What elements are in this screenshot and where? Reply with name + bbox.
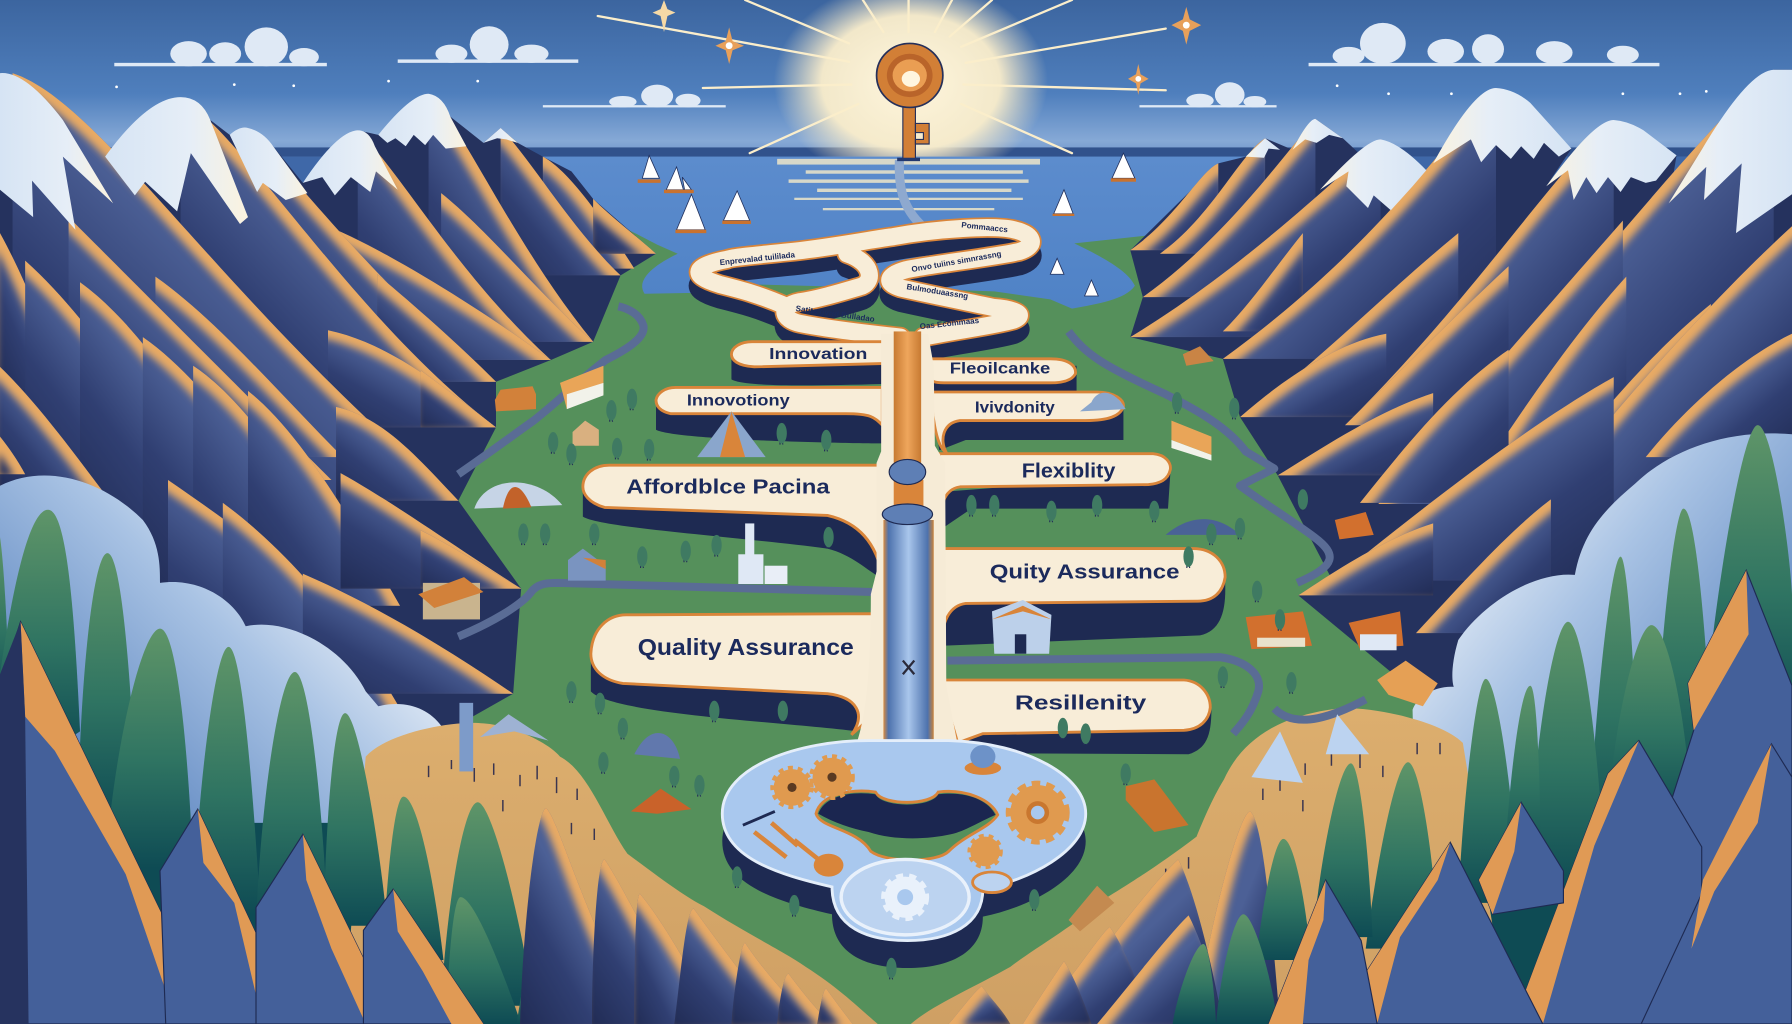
left spires on hill xyxy=(520,808,853,1024)
ribbon: Quality Assurance: Quality Assurance xyxy=(638,634,854,660)
foreground forest floor left xyxy=(0,823,457,1024)
trail from key xyxy=(899,160,928,231)
lake xyxy=(537,157,1269,309)
ribbon: second right label: Ivivdonity xyxy=(975,400,1055,417)
ribbon: Quality Assurance xyxy=(591,614,874,735)
valley buildings and landmarks xyxy=(418,346,1438,931)
winding ribbon labels: Onvo tuiins simnrassng xyxy=(911,249,1002,274)
green valley xyxy=(343,229,1486,1024)
right spires on hill xyxy=(949,811,1280,1024)
winding ribbon labels: Enprevalad tuililada xyxy=(719,250,796,267)
sailboats xyxy=(638,153,1136,296)
ribbon: Affordable pricing xyxy=(583,465,882,577)
ribbon: top right label xyxy=(930,359,1077,400)
right mountain range xyxy=(1130,70,1792,754)
key base plate xyxy=(722,741,1086,968)
hill tick marks xyxy=(429,743,1440,880)
ribbon: Quity Assurance: Quity Assurance xyxy=(990,560,1179,583)
left snow caps xyxy=(0,73,518,230)
ribbon: Quity Assurance xyxy=(941,549,1225,646)
ribbon: Resilience xyxy=(939,680,1211,754)
foreground forest floor right xyxy=(1417,823,1792,1024)
icons: gears and tools on the plate xyxy=(743,745,1065,893)
horizon band xyxy=(0,147,1792,157)
central trunk xyxy=(851,334,958,754)
sun glow xyxy=(774,0,1048,185)
ribbon: second left label xyxy=(656,387,882,443)
ribbon: top right label: Fleoilcanke xyxy=(950,361,1050,378)
ribbon: Flexibility: Flexiblity xyxy=(1022,460,1116,483)
central key shaft xyxy=(882,331,934,777)
top winding ribbon xyxy=(699,228,1031,351)
right tan hill xyxy=(911,708,1509,1024)
clouds xyxy=(114,23,1659,107)
small trees xyxy=(518,389,1308,979)
right cloud bank xyxy=(1413,433,1792,914)
sky background xyxy=(0,0,1792,157)
ribbon: Innovation: Innovation xyxy=(769,346,867,363)
sun rays xyxy=(598,0,1166,153)
left tan hill xyxy=(343,723,878,1024)
key icon xyxy=(877,43,943,161)
left mountain range xyxy=(0,73,656,800)
ribbon: second right label xyxy=(930,392,1124,453)
ribbon: Innovation xyxy=(731,342,886,385)
left cloud bank xyxy=(0,475,441,914)
ribbon: Flexibility xyxy=(939,454,1170,531)
ribbon: Affordable pricing: Affordblce Pacina xyxy=(626,476,830,499)
winding ribbon labels: Pommaaccs xyxy=(961,220,1009,234)
winding ribbon labels: Bulmoduaassng xyxy=(906,282,969,301)
ribbon: second left label: Innovotiony xyxy=(687,393,790,410)
ribbon: Resilience: Resillenity xyxy=(1015,692,1147,715)
winding ribbon labels: Satits gyrid Bulladao xyxy=(795,304,875,324)
right snow caps xyxy=(1246,70,1792,233)
stars xyxy=(115,0,1753,95)
right foreground rock peaks xyxy=(1269,570,1792,1024)
sun reflection on water xyxy=(777,159,1040,210)
winding ribbon labels: Oas Ecommaas xyxy=(919,316,980,331)
right foreground trees xyxy=(1173,425,1792,1024)
roads xyxy=(458,306,1366,734)
left foreground trees xyxy=(0,510,560,1024)
winding ribbon labels xyxy=(719,220,1009,331)
left foreground rock peaks xyxy=(0,622,483,1024)
